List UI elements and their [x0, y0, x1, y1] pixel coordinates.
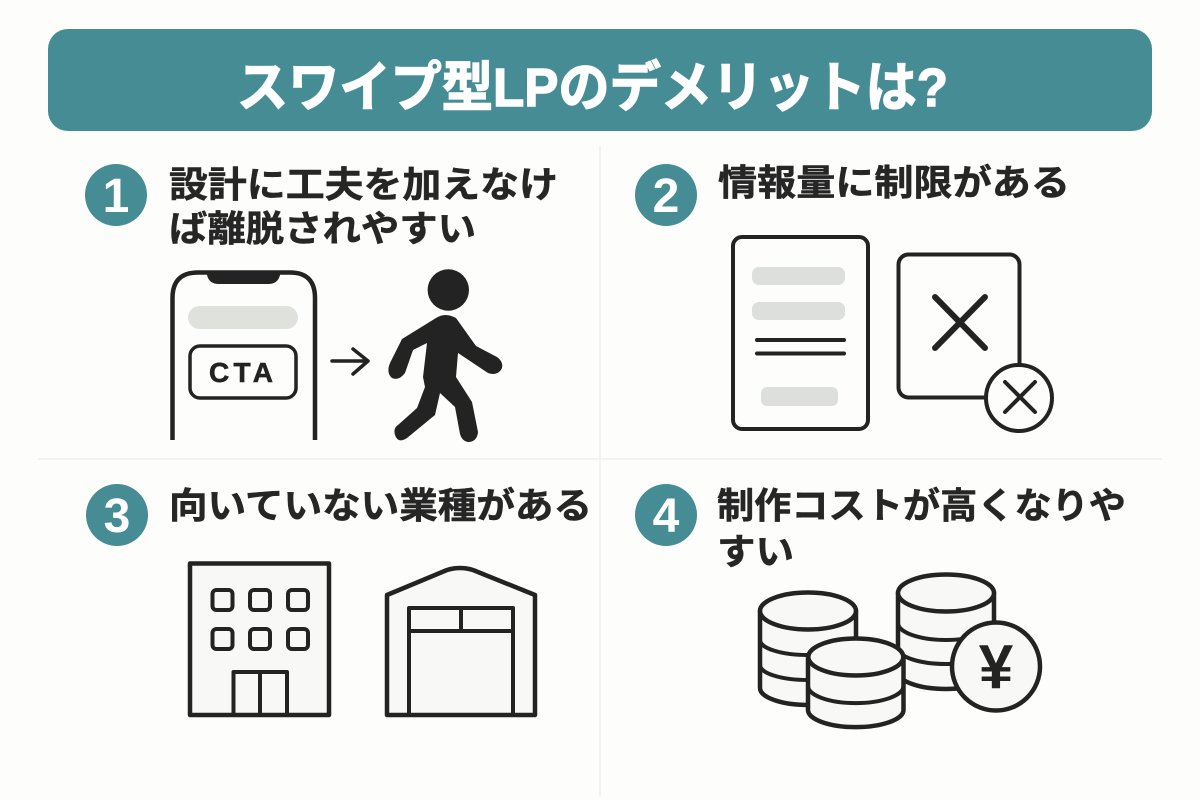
- number badge 4: [635, 484, 697, 546]
- title banner: [48, 29, 1152, 131]
- icon: smartphone with CTA: CTA: [209, 357, 273, 388]
- icon: office building: [190, 564, 329, 715]
- number badge 3: 3: [104, 490, 130, 543]
- arrow: [332, 349, 368, 374]
- heading 1: ば離脱されやすい: [169, 208, 476, 249]
- number badge 2: 2: [653, 170, 679, 223]
- coin stack front: [808, 638, 904, 727]
- number badge 3: [86, 484, 148, 546]
- heading 4: 制作コストが高くなりや: [717, 485, 1126, 526]
- heading 2: 情報量に制限がある: [718, 162, 1070, 203]
- number badge 1: 1: [103, 170, 129, 223]
- heading 4: [717, 485, 1126, 572]
- icon: coin stacks and yen: [760, 574, 1040, 727]
- title banner: スワイプ型LPのデメリットは?: [237, 58, 948, 118]
- icon: crossed card: [898, 254, 1052, 431]
- number badge 2: [635, 164, 697, 226]
- heading 4: すい: [717, 531, 794, 572]
- panel 4: cost: [635, 484, 1126, 727]
- heading 1: [169, 164, 558, 249]
- heading 1: 設計に工夫を加えなけ: [169, 164, 558, 205]
- number badge 4: 4: [653, 490, 680, 543]
- icon: smartphone with CTA: [172, 272, 315, 440]
- panel 3: industries: [86, 484, 592, 715]
- yen coin: ¥: [979, 633, 1014, 702]
- coin stack left: [760, 592, 856, 705]
- icon: walking person: [388, 269, 502, 442]
- panel 1: drop-off: [85, 164, 558, 442]
- coin stack right: [898, 574, 994, 689]
- heading 3: 向いていない業種がある: [169, 485, 592, 526]
- icon: document: [733, 237, 868, 429]
- panel 2: info limit: [635, 162, 1070, 431]
- yen coin: [952, 622, 1040, 710]
- number badge 1: [85, 164, 147, 226]
- icon: warehouse: [387, 568, 535, 715]
